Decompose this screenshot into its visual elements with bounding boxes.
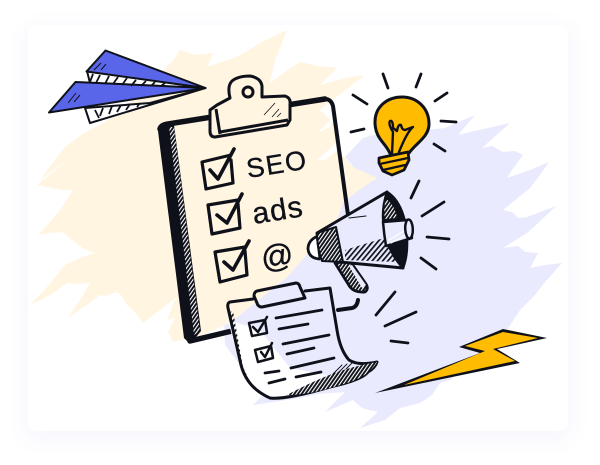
paper checkbox 2 (255, 343, 273, 362)
cream brush stroke (30, 30, 377, 342)
label: ads: ads (250, 190, 306, 231)
paper curl shading (287, 362, 377, 395)
label: at sign: @ (258, 236, 296, 276)
white streaks near clipboard corner (317, 117, 343, 160)
bulb filament (389, 121, 413, 154)
checklist item: ads (208, 190, 306, 234)
bulb glass (375, 97, 429, 156)
bulb base (379, 152, 409, 175)
note paper (228, 283, 377, 398)
sound lines around megaphone (376, 181, 449, 343)
paper clip tab (254, 283, 305, 307)
light bulb (375, 97, 429, 175)
megaphone knob (405, 219, 413, 239)
light rays around bulb (351, 74, 456, 151)
megaphone cone (317, 192, 403, 268)
icon: at sign checkbox (215, 241, 249, 282)
megaphone mouth band (383, 220, 412, 246)
lavender brush stroke (224, 115, 562, 428)
icon: ads checkbox (208, 194, 242, 234)
megaphone rear band (317, 227, 343, 262)
clipboard frame (158, 99, 358, 342)
megaphone handle (335, 261, 367, 292)
paper plane (49, 50, 206, 123)
megaphone bell (383, 192, 407, 268)
icon: SEO checkbox (202, 149, 234, 189)
paper text lines (265, 310, 334, 383)
paper checkbox 1 (249, 317, 267, 336)
lightning bolt (375, 329, 547, 393)
checklist item: at sign (215, 236, 296, 282)
megaphone back cap (308, 236, 319, 259)
label: SEO: SEO (244, 145, 310, 184)
checklist item: SEO (202, 145, 310, 189)
megaphone lower shading (345, 238, 397, 262)
background card (28, 25, 568, 431)
clipboard clip (210, 76, 290, 137)
megaphone (308, 192, 413, 292)
